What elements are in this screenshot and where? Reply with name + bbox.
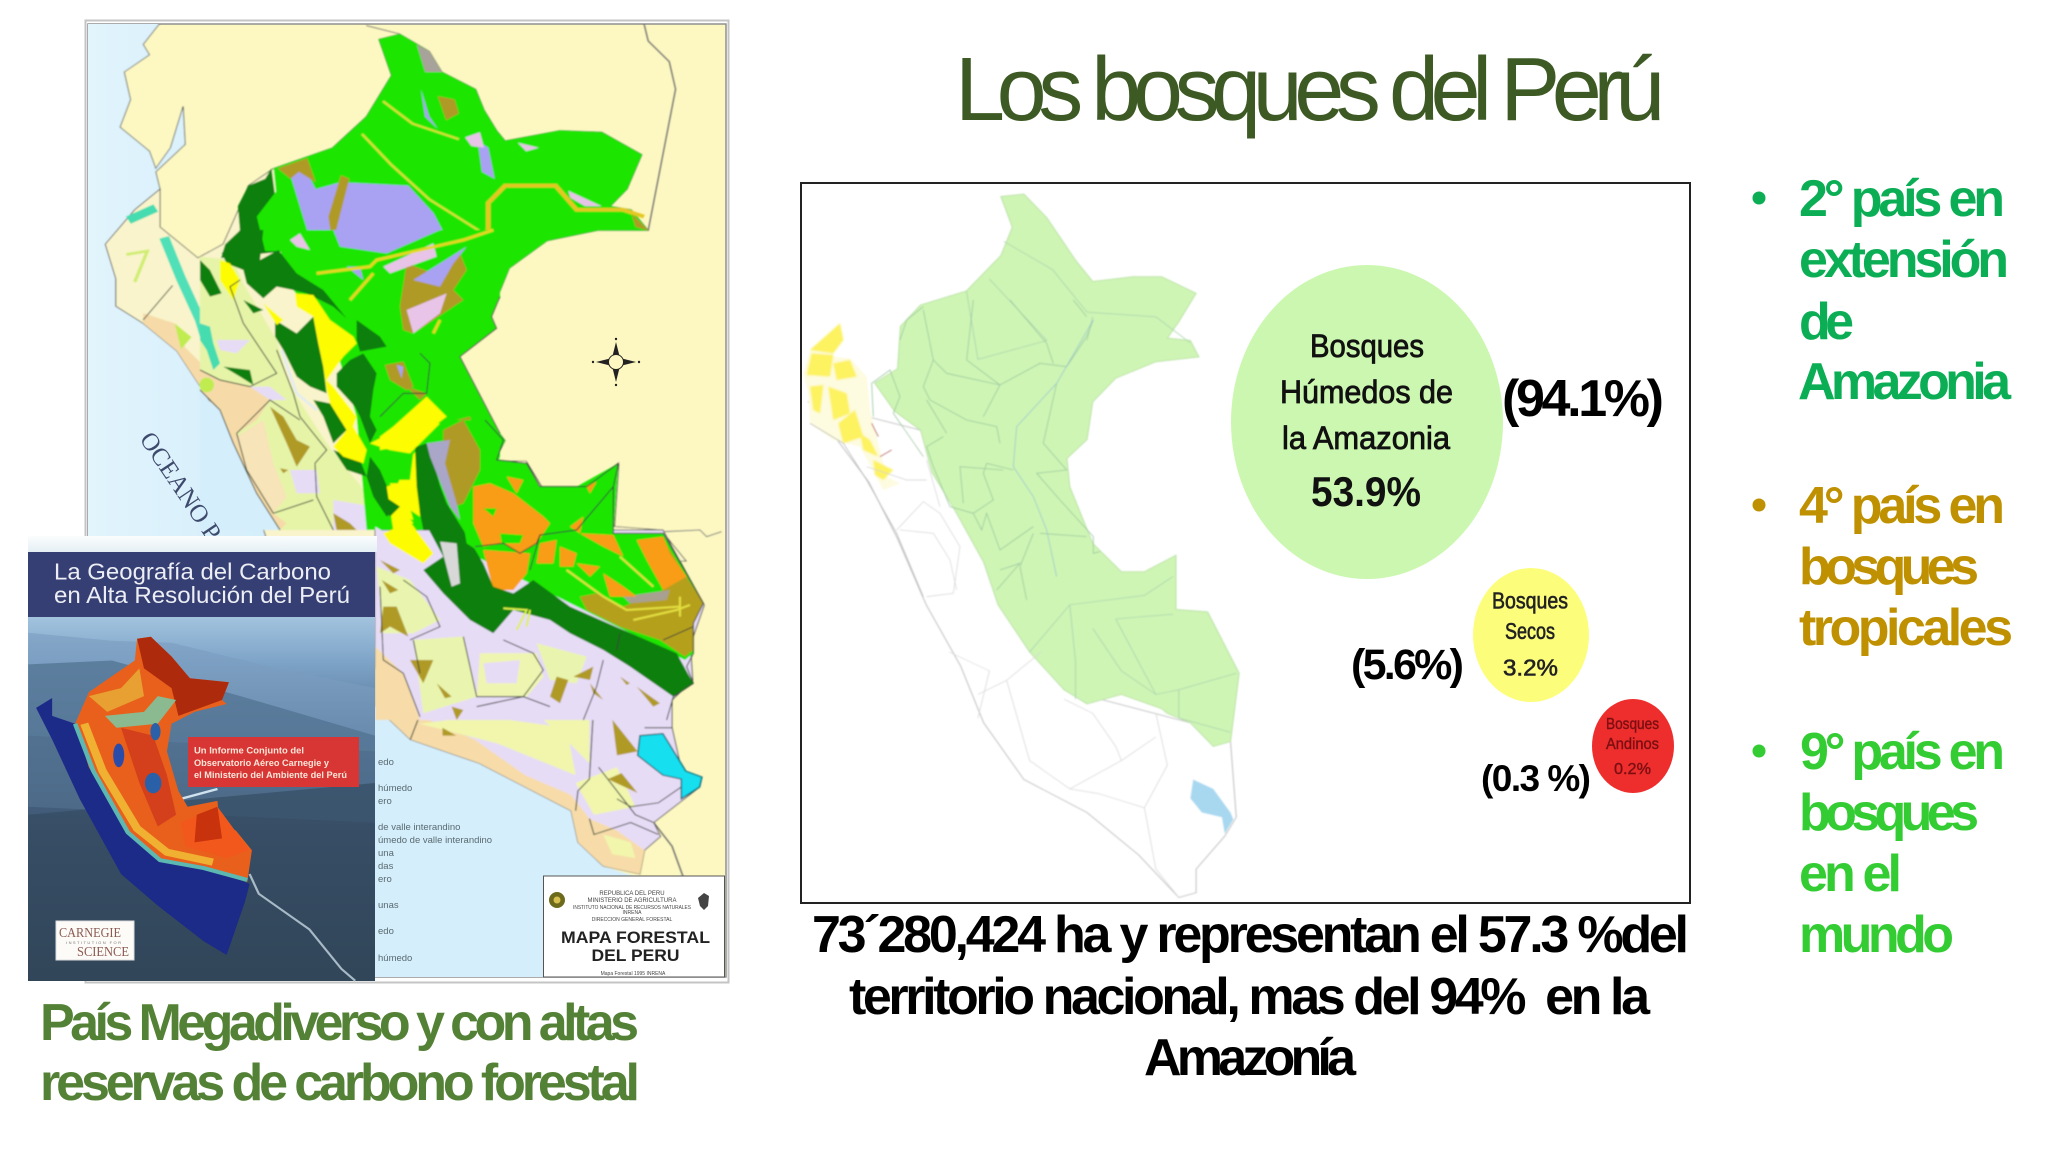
department lines in the southern Andes [949, 652, 1179, 897]
red report label: Observatorio Aéreo Carnegie y [194, 758, 330, 769]
circle: dry forests: Bosques [1492, 588, 1568, 614]
circle: Andean forests: Andinos [1606, 736, 1659, 753]
summary text: 73´280,424 ha y representan el 57.3 %del [812, 906, 1689, 964]
dark green band [415, 447, 693, 697]
olive fringes [278, 158, 316, 182]
Peru, northern forest zones [105, 34, 686, 561]
circle: humid Amazon forests: la Amazonia [1282, 420, 1450, 456]
lavender basin [290, 170, 444, 232]
panel: book cover [28, 536, 377, 981]
north-west dry forests and central rivers [803, 300, 1100, 600]
legend fragments beside the book cover: das [378, 861, 394, 872]
Peru, southern base zones [375, 530, 704, 874]
department borders [200, 280, 430, 530]
icon: compass rose [592, 338, 640, 386]
legend fragments beside the book cover: húmedo [378, 783, 412, 794]
ministry text lines [573, 891, 692, 923]
caption: megadiverse country: País Megadiverso y con altas [40, 994, 639, 1052]
circle: dry forests [1473, 568, 1589, 702]
yellow rivers [362, 101, 484, 234]
Carnegie Science logo: CARNEGIE [59, 925, 121, 940]
olive patches on lavender [380, 560, 660, 720]
icon: national crest [698, 893, 709, 910]
map title text: MAPA FORESTAL [561, 928, 710, 947]
red report label [188, 737, 359, 787]
map of Peru with forest zones [803, 194, 1239, 897]
ministry text lines: INSTITUTO NACIONAL DE RECURSOS NATURALES [573, 905, 692, 911]
circle: dry forests: Secos [1505, 618, 1555, 644]
yellow pre-montane forest [220, 260, 447, 530]
rivers, north and south of the Amazon zone [966, 241, 1236, 732]
ranking: tropical forests: 4° país en [1799, 477, 2005, 535]
panel: forest types map [801, 183, 1690, 903]
ranking: world forests: en el [1799, 845, 1902, 903]
circle: humid Amazon forests: Húmedos de [1280, 374, 1453, 410]
ranking: tropical forests: tropicales [1799, 599, 2013, 657]
summary text [812, 906, 1689, 1087]
share: dry forests: (5.6%) [1351, 641, 1464, 689]
Carnegie Science logo: SCIENCE [77, 944, 129, 959]
dark green montane forest [200, 230, 460, 530]
circle: dry forests: 3.2% [1503, 654, 1558, 680]
summary text: Amazonía [1144, 1029, 1357, 1087]
map title block: DEL PERU [592, 946, 680, 965]
label: Pacific Ocean: OCEANO P [134, 427, 226, 545]
ranking: Amazon extension: Amazonia [1798, 353, 2012, 411]
circle: Andean forests: 0.2% [1614, 761, 1651, 778]
book title: en Alta Resolución del Perú [54, 582, 350, 608]
caption: megadiverse country: reservas de carbono forestal [40, 1054, 640, 1112]
Peru, south-east forest detail [370, 420, 722, 720]
panel: forest map of Peru [84, 20, 729, 982]
circle: humid Amazon forests: 53.9% [1311, 468, 1421, 515]
legend fragments beside the book cover: una [378, 848, 395, 859]
book title: La Geografía del Carbono [54, 558, 331, 584]
ocean, upper part [84, 20, 676, 561]
legend fragments beside the book cover: úmedo de valle interandino [378, 835, 492, 846]
circle: humid Amazon forests [1231, 265, 1503, 579]
ranking: tropical forests [1752, 477, 2013, 657]
ranking: Amazon extension [1752, 170, 2012, 411]
lake Titicaca [638, 734, 702, 799]
ranking: Amazon extension: 2° país en [1799, 170, 2005, 228]
orange forest patches [473, 477, 687, 597]
share: Andean forests: (0.3 %) [1481, 758, 1591, 799]
caption: megadiverse country [40, 994, 640, 1112]
legend fragments beside the book cover: edo [378, 757, 394, 768]
red report label: Un Informe Conjunto del [194, 746, 304, 756]
map title block: Mapa Forestal 1995 INRENA [601, 971, 666, 977]
red report label: el Ministerio del Ambiente del Perú [194, 770, 347, 781]
circle: humid Amazon forests: Bosques [1310, 328, 1424, 364]
Amazon green east of the Andes [273, 230, 500, 530]
legend fragments beside the book cover: de valle interandino [378, 822, 460, 833]
ranking: world forests: bosques [1799, 784, 1979, 842]
ranking: world forests [1752, 723, 2005, 964]
Peru, central Andes detail [199, 230, 500, 530]
ministry text lines: MINISTERIO DE AGRICULTURA [588, 898, 676, 904]
ministry text lines: DIRECCION GENERAL FORESTAL [592, 917, 672, 923]
ocean, lower part [375, 705, 684, 977]
icon: ministry emblem [549, 892, 565, 908]
share: humid Amazon forests: (94.1%) [1502, 370, 1664, 428]
Carnegie Science logo: INSTITUTION FOR [66, 940, 121, 945]
circle: Andean forests: Bosques [1606, 716, 1659, 733]
legend fragments beside the book cover: unas [378, 900, 399, 911]
ranking: world forests: 9° país en [1800, 723, 2005, 781]
book title [54, 558, 350, 608]
map title block [544, 876, 724, 977]
yellow forest patches [370, 420, 440, 563]
legend fragments beside the book cover: ero [378, 874, 392, 885]
title: Los bosques del Perú [955, 40, 1665, 140]
circle: Andean forests [1592, 699, 1674, 793]
Carnegie Science logo [56, 921, 134, 960]
ranking: world forests: mundo [1799, 906, 1954, 964]
summary text: territorio nacional, mas del 94% en la [849, 968, 1651, 1026]
ministry text lines: REPUBLICA DEL PERU [599, 891, 665, 897]
borders of the south-east zone [380, 420, 703, 720]
ranking: Amazon extension: de [1799, 293, 1854, 351]
ranking: tropical forests: bosques [1799, 538, 1979, 596]
legend fragments beside the book cover: edo [378, 926, 394, 937]
book cover photo and carbon map [28, 633, 375, 981]
ministry text lines: INRENA [623, 910, 642, 916]
bright green Amazon [274, 34, 648, 492]
ranking: Amazon extension: extensión [1799, 231, 2009, 289]
dark green northern strip [221, 168, 286, 258]
legend fragments beside the book cover: húmedo [378, 953, 412, 964]
book header band [28, 552, 375, 617]
legend fragments beside the book cover [378, 757, 492, 964]
legend fragments beside the book cover: ero [378, 796, 392, 807]
